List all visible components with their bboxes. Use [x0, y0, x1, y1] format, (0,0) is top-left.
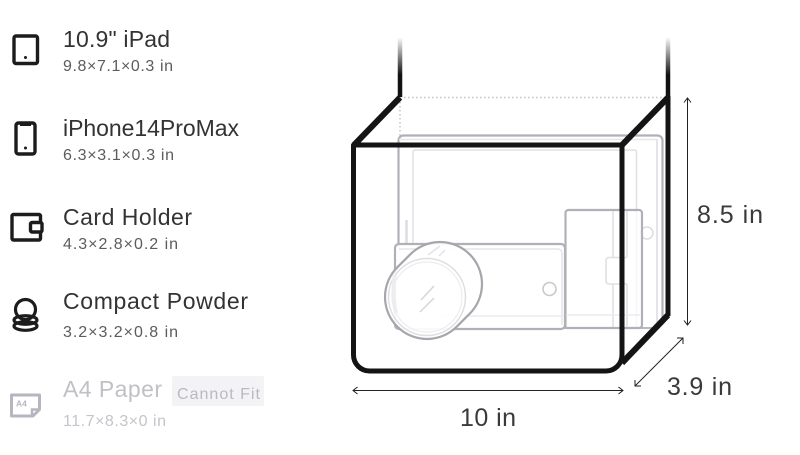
item: iPad [14, 26, 173, 75]
label: depth: 3.9 in [667, 373, 732, 401]
item: compact powder [14, 288, 248, 341]
item name: card holder: Card Holder [63, 204, 192, 230]
arrow: width [353, 387, 623, 394]
badge: cannot fit [172, 376, 264, 406]
item size: compact powder: 3.2×3.2×0.8 in [63, 324, 178, 341]
phone outline [395, 244, 565, 329]
item name: A4 paper: A4 Paper [63, 376, 162, 402]
icon: phone [16, 122, 35, 154]
back edge dotted lines [400, 98, 668, 136]
item: A4 paper [12, 376, 264, 430]
item: iPhone [16, 115, 240, 164]
dimension: depth [635, 338, 732, 401]
dimension: height [684, 98, 763, 325]
bag outline [354, 96, 668, 371]
diagram: bag with contents [354, 37, 668, 371]
compact powder outline [385, 242, 482, 339]
arrow: depth [635, 338, 683, 386]
item size: iPad: 9.8×7.1×0.3 in [63, 58, 173, 75]
bag strap: right [666, 37, 670, 97]
dimension: width [353, 387, 623, 432]
item size: card holder: 4.3×2.8×0.2 in [63, 236, 178, 253]
badge: cannot fit: Cannot Fit [177, 386, 261, 403]
item name: compact powder: Compact Powder [63, 288, 248, 314]
label: height: 8.5 in [697, 201, 763, 229]
label: width: 10 in [460, 404, 516, 432]
item name: iPad: 10.9" iPad [63, 26, 170, 52]
icon: paper [12, 395, 40, 416]
tablet outline [398, 136, 662, 328]
icon: wallet [12, 214, 42, 240]
icon: paper: A4 [16, 398, 27, 408]
icon: compact [14, 300, 37, 330]
arrow: height [684, 98, 691, 325]
item size: iPhone: 6.3×3.1×0.3 in [63, 147, 174, 164]
bag strap: left [398, 37, 402, 97]
icon: tablet [14, 36, 38, 64]
item size: A4 paper: 11.7×8.3×0 in [63, 413, 166, 430]
card holder outline [566, 210, 642, 329]
item: card holder [12, 204, 192, 253]
item name: iPhone: iPhone14ProMax [63, 115, 240, 141]
